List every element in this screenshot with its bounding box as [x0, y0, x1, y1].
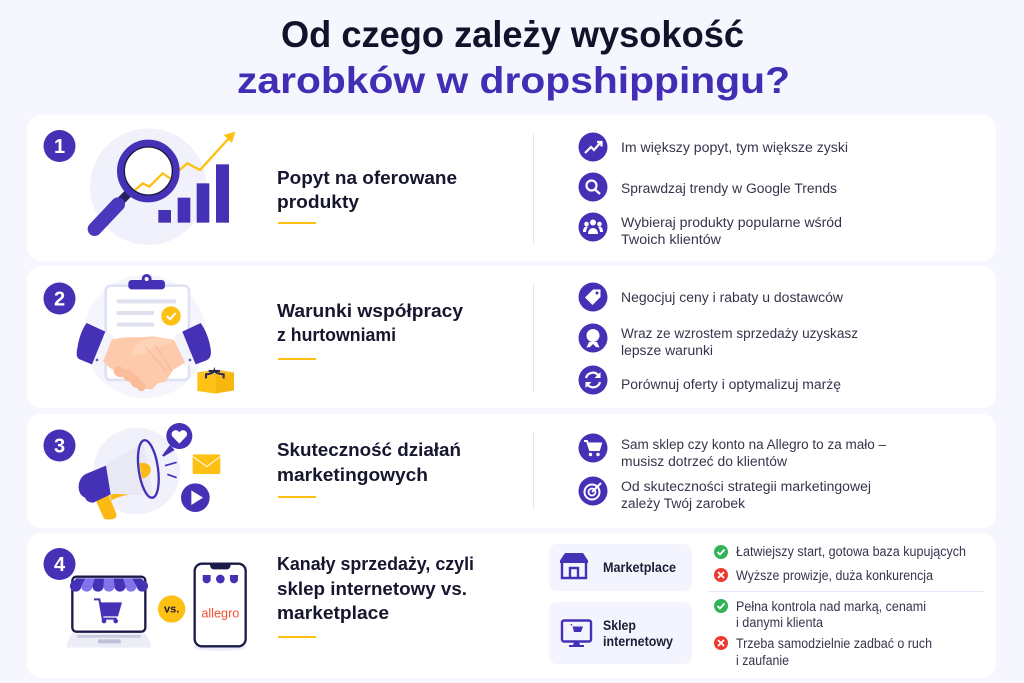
bullet: dotarcie — [578, 434, 886, 469]
bullet: popyt: Im większy popyt, tym większe zyski — [621, 140, 848, 155]
bullet: strategia — [578, 476, 871, 511]
bullet: warunki: lepsze warunki — [621, 343, 713, 358]
illustration: handshake and contract — [77, 274, 234, 398]
bullet: trendy — [578, 172, 837, 202]
title: Od czego zależy wysokość — [281, 14, 744, 55]
pros and cons: sklep internetowy: i danymi klienta — [736, 615, 823, 630]
heading — [277, 554, 474, 623]
pros and cons: marketplace: Łatwiejszy start, gotowa baza kupujących — [736, 544, 966, 559]
heading — [277, 168, 457, 212]
heading: Popyt na oferowane — [277, 168, 457, 188]
bullet: trendy: Sprawdzaj trendy w Google Trends — [621, 181, 837, 196]
bullet: ceny — [578, 282, 843, 312]
heading: Skuteczność działań — [277, 440, 461, 460]
box: marketplace — [549, 544, 692, 591]
number badge 4 — [44, 548, 76, 580]
heading: marketplace — [277, 603, 389, 623]
pros and cons: sklep internetowy: Pełna kontrola nad marką, cenami — [736, 599, 926, 614]
pros and cons: sklep internetowy: Trzeba samodzielnie zadbać o ruch — [736, 636, 932, 651]
bullet: warunki: Wraz ze wzrostem sprzedaży uzyskasz — [621, 326, 858, 341]
box: sklep internetowy — [549, 602, 692, 664]
number badge 1: 1 — [54, 136, 65, 158]
bullet: warunki — [578, 324, 858, 358]
title: zarobków w dropshippingu? — [237, 60, 790, 101]
number badge 2 — [44, 282, 76, 314]
box: sklep internetowy: internetowy — [603, 634, 673, 649]
panel: warunki — [27, 266, 996, 408]
heading: Kanały sprzedaży, czyli — [277, 554, 474, 574]
accent underline — [278, 636, 316, 638]
panel: marketing — [27, 414, 996, 528]
pros and cons: marketplace: Wyższe prowizje, duża konkurencja — [736, 568, 933, 583]
bullet: popyt — [578, 132, 848, 162]
heading: z hurtowniami — [277, 325, 396, 345]
box: marketplace: Marketplace — [603, 560, 676, 575]
heading: Warunki współpracy — [277, 301, 463, 321]
illustration: megaphone — [79, 423, 220, 519]
heading — [277, 301, 463, 345]
illustration: online store laptop vs allegro phone: allegro — [201, 606, 239, 621]
bullet: strategia: Od skuteczności strategii marketingowej — [621, 479, 871, 494]
number badge 4: 4 — [54, 554, 66, 576]
accent underline — [278, 358, 316, 360]
bullet: marża: Porównuj oferty i optymalizuj marżę — [621, 377, 841, 392]
panel: kanały sprzedaży — [27, 533, 996, 678]
heading: sklep internetowy vs. — [277, 579, 467, 599]
number badge 3: 3 — [54, 436, 65, 458]
number badge 3 — [44, 430, 76, 462]
title — [237, 14, 790, 101]
bullet: klienci — [578, 212, 842, 247]
bullet: dotarcie: Sam sklep czy konto na Allegro to za mało – — [621, 437, 886, 452]
bullet: klienci: Wybieraj produkty popularne wśród — [621, 215, 842, 230]
illustration: online store laptop vs allegro phone: vs. — [164, 604, 179, 616]
heading: produkty — [277, 192, 359, 212]
bullet: dotarcie: musisz dotrzeć do klientów — [621, 454, 787, 469]
heading: marketingowych — [277, 465, 428, 485]
accent underline — [278, 222, 316, 224]
bullet: klienci: Twoich klientów — [621, 232, 721, 247]
illustration: magnifier and growth chart — [90, 128, 235, 245]
panel: popyt — [27, 115, 996, 261]
box: sklep internetowy: Sklep — [603, 618, 636, 633]
number badge 2: 2 — [54, 288, 65, 310]
accent underline — [278, 496, 316, 498]
pros and cons: sklep internetowy — [714, 599, 932, 668]
pros and cons: marketplace — [714, 544, 966, 583]
pros and cons: sklep internetowy: i zaufanie — [736, 653, 789, 668]
bullet: marża — [578, 366, 841, 394]
number badge 1 — [44, 130, 76, 162]
bullet: ceny: Negocjuj ceny i rabaty u dostawców — [621, 290, 843, 305]
illustration: online store laptop vs allegro phone — [67, 564, 247, 651]
bullet: strategia: zależy Twój zarobek — [621, 496, 745, 511]
heading — [277, 440, 461, 485]
